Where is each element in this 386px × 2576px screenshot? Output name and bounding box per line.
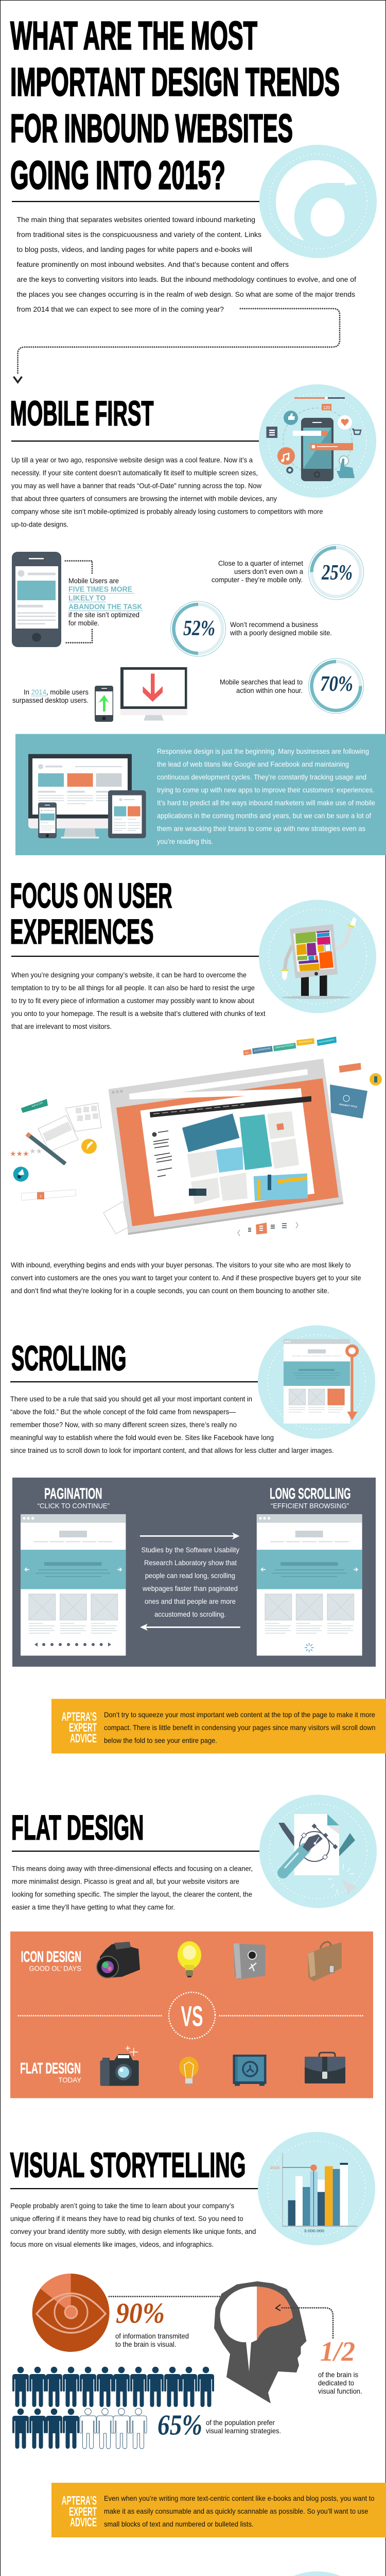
icon: flat safe [233, 2055, 267, 2086]
icon: bar chart circle [258, 2132, 375, 2245]
intro text: feature prominently on most inbound websites. And that’s because content and offers [16, 260, 289, 268]
icon: flat briefcase [305, 2053, 345, 2083]
versus badge: VS [181, 2000, 203, 2032]
stat: half of brain: 1/2 [320, 2336, 355, 2367]
illustration: add to cart and UI sheets: ★★★ [10, 1150, 29, 1158]
icon: mobile apps circle [259, 384, 376, 498]
callout: expert advice storytelling: small blocks of text and numbered or bulleted lists. [104, 2520, 254, 2528]
stat: five times more likely: Mobile Users are [68, 577, 119, 585]
intro text: from 2014 that we can expect to see more of in the coming year? [16, 305, 224, 313]
icon: realistic light bulb [178, 1941, 201, 1977]
text block: usability study: ones and that people are more [145, 1597, 236, 1605]
wireframe: paginated page [21, 1514, 126, 1656]
stat: 70 percent: Mobile searches that lead to [220, 678, 303, 686]
text block: buyer personas: convert into customers are the ones you want to target your content to. And if these prospective buyers get to your site [11, 1274, 361, 1282]
icon: desktop with red down arrow [120, 667, 187, 721]
icon: responsive devices [28, 754, 146, 839]
heading: Focus on User Experiences: EXPERIENCES [10, 912, 153, 951]
illustration: add to cart and UI sheets: 2 [40, 1195, 42, 1198]
illustration: project card and cancel button [238, 1063, 382, 1236]
text block: flat design: looking for something specific. The simpler the layout, the clearer the content, the [12, 1890, 252, 1898]
text block: visual storytelling: People probably aren’t going to take the time to learn about your company’s [10, 2201, 234, 2210]
stat: 2014 mobile surpassed desktop: surpassed desktop users. [12, 696, 89, 704]
panel: responsive design [15, 734, 386, 855]
icon: phone wireframe [12, 552, 61, 647]
text block: buyer personas: and don’t find what they’re looking for in a couple seconds, you can count on them bouncing to another site. [11, 1286, 329, 1295]
heading: Scrolling: SCROLLING [11, 1338, 127, 1378]
intro paragraph: mobile first: that about three quarters of consumers are browsing the internet with mobile devices, any [11, 495, 277, 503]
icon: bar chart circle: 2015 [270, 2166, 279, 2170]
stat: 65 percent: 65% [157, 2410, 202, 2442]
arrow: dotted link brain to half stat [276, 2304, 333, 2338]
text block: usability study: Research Laboratory show that [144, 1558, 237, 1567]
stat: 52 percent: with a poorly designed mobile site. [230, 629, 332, 637]
illustration: website tags [243, 1037, 337, 1056]
text block: scrolling: There used to be a rule that said you should get all your most important content in [10, 1395, 252, 1403]
text block: usability study: webpages faster than paginated [142, 1584, 238, 1592]
arrow: dotted connector to Mobile First [13, 309, 340, 382]
icon: pen tool circle [259, 1795, 377, 1908]
icon: intro logo circle [259, 145, 377, 258]
callout: expert advice storytelling: ADVICE [70, 2516, 97, 2530]
icon: mobile apps circle: 120 [323, 405, 330, 410]
illustration: project card and cancel button: PROJECT TITLE [339, 1103, 357, 1108]
panel: icon design vs flat design [10, 1931, 373, 2098]
callout: expert advice scrolling [51, 1699, 386, 1754]
stat: 70 percent: 70% [320, 672, 353, 696]
text block: flat design: This means doing away with three-dimensional effects and focusing on a cleaner, [12, 1864, 253, 1872]
icon: realistic briefcase [308, 1942, 342, 1981]
stat: 90 percent: of information transmited [115, 2332, 189, 2340]
stat: 70 percent [220, 658, 363, 714]
label: flat design: FLAT DESIGN [20, 2060, 81, 2077]
arrow: dotted link eye to brain [109, 2297, 233, 2327]
heading: pagination [38, 1485, 110, 1510]
stat: 2014 mobile surpassed desktop: In 2014, mobile users [24, 688, 89, 696]
text block: visual storytelling [10, 2201, 256, 2248]
stat: 52 percent: Won’t recommend a business [230, 620, 318, 629]
intro text: the places you see changes occurring is in the realm of web design. So what are some of the major trends [16, 290, 355, 298]
text block: flat design [12, 1864, 253, 1911]
stat: five times more likely: if the site isn’t optimized [68, 611, 139, 619]
illustration: website tags: ALL [244, 1051, 250, 1054]
text block: responsive design: the lead of web titans like Google and Facebook and maintaining [157, 760, 349, 768]
stat: 25 percent mobile only [212, 545, 363, 600]
icon: target monitor circle [293, 2571, 341, 2576]
intro paragraph: mobile first: you may as well have a banner that reads “Out-of-Date” running across the top. Now [11, 481, 262, 489]
title [10, 13, 340, 198]
icon: flat light bulb [179, 2057, 199, 2086]
callout: expert advice scrolling: below the fold to see your entire page. [104, 1736, 217, 1744]
stat: 90 percent: to the brain is visual. [115, 2340, 176, 2348]
text block: scrolling [10, 1395, 334, 1454]
intro paragraph: mobile first: up-to-date designs. [11, 520, 68, 529]
text block: usability study [141, 1546, 239, 1618]
text block: buyer personas: With inbound, everything begins and ends with your buyer personas. The visitors to your site who are most likely to [11, 1261, 351, 1269]
stat: five times more likely [68, 577, 143, 627]
text block: responsive design: them are wracking their brains to come up with new strategies even as [157, 824, 365, 833]
icon: realistic safe [233, 1943, 266, 1979]
stat: half of brain [318, 2336, 362, 2395]
text block: scrolling: remember those? Now, with so many different screen sizes, there’s really no [10, 1420, 237, 1429]
text block: usability study: Studies by the Software Usability [141, 1546, 239, 1554]
stat: 25 percent mobile only: users don’t even own a [234, 567, 303, 575]
text block: responsive design: trying to come up with new apps to improve their customers’ experiences. [157, 786, 375, 794]
icon: bar chart circle: 3.000.000 [304, 2230, 324, 2233]
pictogram: 65 percent people [12, 2367, 214, 2449]
callout: expert advice storytelling: EXPERT [69, 2505, 97, 2519]
stat: 70 percent: action within one hour. [236, 686, 303, 694]
stat: 52 percent: 52% [183, 617, 215, 640]
icon: realistic camera [97, 1942, 140, 1978]
heading: Focus on User Experiences: FOCUS ON USER [10, 876, 172, 915]
illustration: website tags: PHOTOGRAPHY [318, 1039, 335, 1044]
label: icon design: ICON DESIGN [21, 1948, 81, 1965]
illustration: add to cart and UI sheets: Add to Cart [31, 1101, 43, 1108]
heading: pagination: “CLICK TO CONTINUE” [38, 1501, 110, 1510]
stat: 25 percent mobile only: Close to a quarter of internet [218, 559, 303, 567]
callout: expert advice storytelling: APTERA’S [62, 2494, 97, 2507]
text block: user experiences: you onto to your homepage. The result is a website that’s cluttered with chunks of text [11, 1009, 266, 1018]
illustration: website tags: GRAPHICS DESIGN [275, 1043, 294, 1049]
intro paragraph: mobile first: Up till a year or two ago, responsive website design was a cool feature. Now it’s a [11, 455, 253, 464]
text block: visual storytelling: unique offering if it means they have to read big chunks of text. So you need to [10, 2214, 243, 2223]
text block: user experiences: to try to fit every piece of information a customer may possibly want to know about [11, 996, 254, 1005]
label: flat design [20, 2060, 82, 2084]
callout: expert advice scrolling: ADVICE [70, 1732, 97, 1745]
text block: user experiences: that are irrelevant to most visitors. [11, 1022, 112, 1030]
intro text: from traditional sites is the conspicuousness and variety of the content. Links [16, 230, 261, 239]
illustration: website tags: WEB DESIGN [299, 1040, 312, 1044]
wireframe: long scrolling page [257, 1514, 362, 1656]
text block: user experiences: When you’re designing your company’s website, it can be hard to overcome the [11, 971, 247, 979]
intro paragraph: mobile first: necessity. If your site content doesn’t automatically fit itself to multiple screen sizes, [11, 469, 258, 477]
arrow: to long scrolling [140, 1532, 239, 1539]
stat: 65 percent: of the population prefer [206, 2418, 275, 2427]
text block: scrolling: meaningful way to establish where the fold would even be. Sites like Facebook have long [10, 1433, 274, 1442]
stat: five times more likely: ABANDON THE TASK [68, 603, 143, 611]
illustration: browser window [108, 1059, 343, 1235]
arrow: dotted bracket around phone stat [65, 561, 92, 643]
text block: scrolling: since trained us to scroll down to look for important content, and that allows for less clutter and larger images. [10, 1446, 334, 1454]
text block: user experiences: temptation to try to be all things for all people. It can also be hard to resist the urge [11, 984, 255, 992]
intro text [16, 215, 356, 313]
heading: long scrolling [270, 1485, 351, 1510]
text block: responsive design: Responsive design is just the beginning. Many businesses are following [157, 747, 369, 755]
text block: usability study: people can read long, scrolling [145, 1571, 235, 1580]
callout: expert advice scrolling: EXPERT [69, 1721, 97, 1735]
intro text: to blog posts, videos, and landing pages for white papers and e-books will [16, 245, 252, 253]
text block: user experiences [11, 971, 266, 1030]
title: GOING INTO 2015? [10, 154, 225, 198]
heading: Flat Design: FLAT DESIGN [11, 1808, 144, 1848]
label: icon design [21, 1948, 81, 1973]
stat: 25 percent mobile only: computer - they’re mobile only. [212, 575, 303, 584]
text block: usability study: accustomed to scrolling. [154, 1610, 226, 1618]
label: flat design: TODAY [58, 2076, 82, 2084]
text block: responsive design: continuous development cycles. They’re constantly tracking usage and [157, 773, 366, 781]
illustration: add to cart and UI sheets: ★★ [29, 1147, 42, 1156]
text block: responsive design: you’re reading this. [157, 837, 213, 845]
stat: 52 percent [171, 601, 332, 656]
stat: five times more likely: FIVE TIMES MORE [68, 586, 132, 594]
icon: eye pie chart [32, 2274, 110, 2352]
versus badge [19, 1992, 364, 2039]
text block: flat design: more minimalist design. Picasso is great and all, but your website visitors are [12, 1877, 239, 1885]
stat: half of brain: dedicated to [318, 2379, 354, 2387]
text block: scrolling: “above the fold.” But the whole concept of the fold came from newspapers— [10, 1408, 236, 1416]
callout: expert advice storytelling: make it as easily consumable and as quickly scannable as possible. So you’ll want to use [104, 2507, 369, 2515]
stat: 2014 mobile surpassed desktop [12, 688, 89, 704]
intro text: are the keys to converting visitors into leads. But the inbound methodology continues to evolve, and one of [16, 275, 356, 283]
text block: flat design: easier a time they’ll have getting to what they came for. [12, 1903, 175, 1911]
intro paragraph: mobile first: company whose site isn’t mobile-optimized is probably already losing customers to competitors with more [11, 507, 323, 515]
icon: scrolling page circle [258, 1325, 375, 1438]
heading: long scrolling: “EFFICIENT BROWSING” [271, 1501, 349, 1510]
callout: expert advice scrolling: APTERA’S [62, 1710, 97, 1724]
text block: responsive design: It’s hard to predict all the ways inbound marketers will make use of mobile [157, 799, 375, 807]
text block: buyer personas [11, 1261, 361, 1295]
illustration: website tags: ILLUSTRATIONS [254, 1047, 271, 1052]
icon: tablet character circle [259, 900, 376, 1013]
text block: responsive design [157, 747, 375, 845]
stat: five times more likely: for mobile. [68, 619, 99, 627]
stat: 65 percent: visual learning strategies. [206, 2427, 281, 2435]
text block: visual storytelling: convey your brand identity more subtly, with design elements like unique fonts, and [10, 2227, 256, 2235]
panel: pagination vs long scrolling [12, 1478, 376, 1667]
text block: visual storytelling: focus more on visual elements like images, videos, and infographics. [10, 2240, 214, 2248]
heading: Focus on User Experiences [10, 876, 172, 951]
callout: expert advice storytelling [51, 2483, 386, 2537]
icon: small phone with green up arrow [95, 686, 113, 722]
stat: five times more likely: LIKELY TO [68, 595, 106, 603]
heading: Mobile First: MOBILE FIRST [10, 394, 153, 433]
arrow: to pagination [140, 1624, 240, 1631]
text block: responsive design: applications in the coming months and years, but we can be sure a lot of [157, 811, 371, 820]
stat: half of brain: of the brain is [318, 2370, 358, 2379]
stat: half of brain: visual function. [318, 2387, 362, 2395]
intro text: The main thing that separates websites oriented toward inbound marketing [16, 215, 255, 224]
label: icon design: GOOD OL’ DAYS [29, 1965, 81, 1973]
stat: 65 percent [157, 2410, 281, 2442]
heading: pagination: PAGINATION [44, 1485, 102, 1502]
illustration: add to cart and UI sheets [10, 1099, 128, 1234]
icon: head with brain [214, 2281, 307, 2403]
stat: 90 percent: 90% [116, 2298, 165, 2330]
stat: 90 percent [115, 2298, 189, 2348]
stat: 25 percent mobile only: 25% [321, 561, 353, 585]
intro paragraph: mobile first [11, 455, 323, 529]
icon: flat camera [100, 2046, 139, 2086]
